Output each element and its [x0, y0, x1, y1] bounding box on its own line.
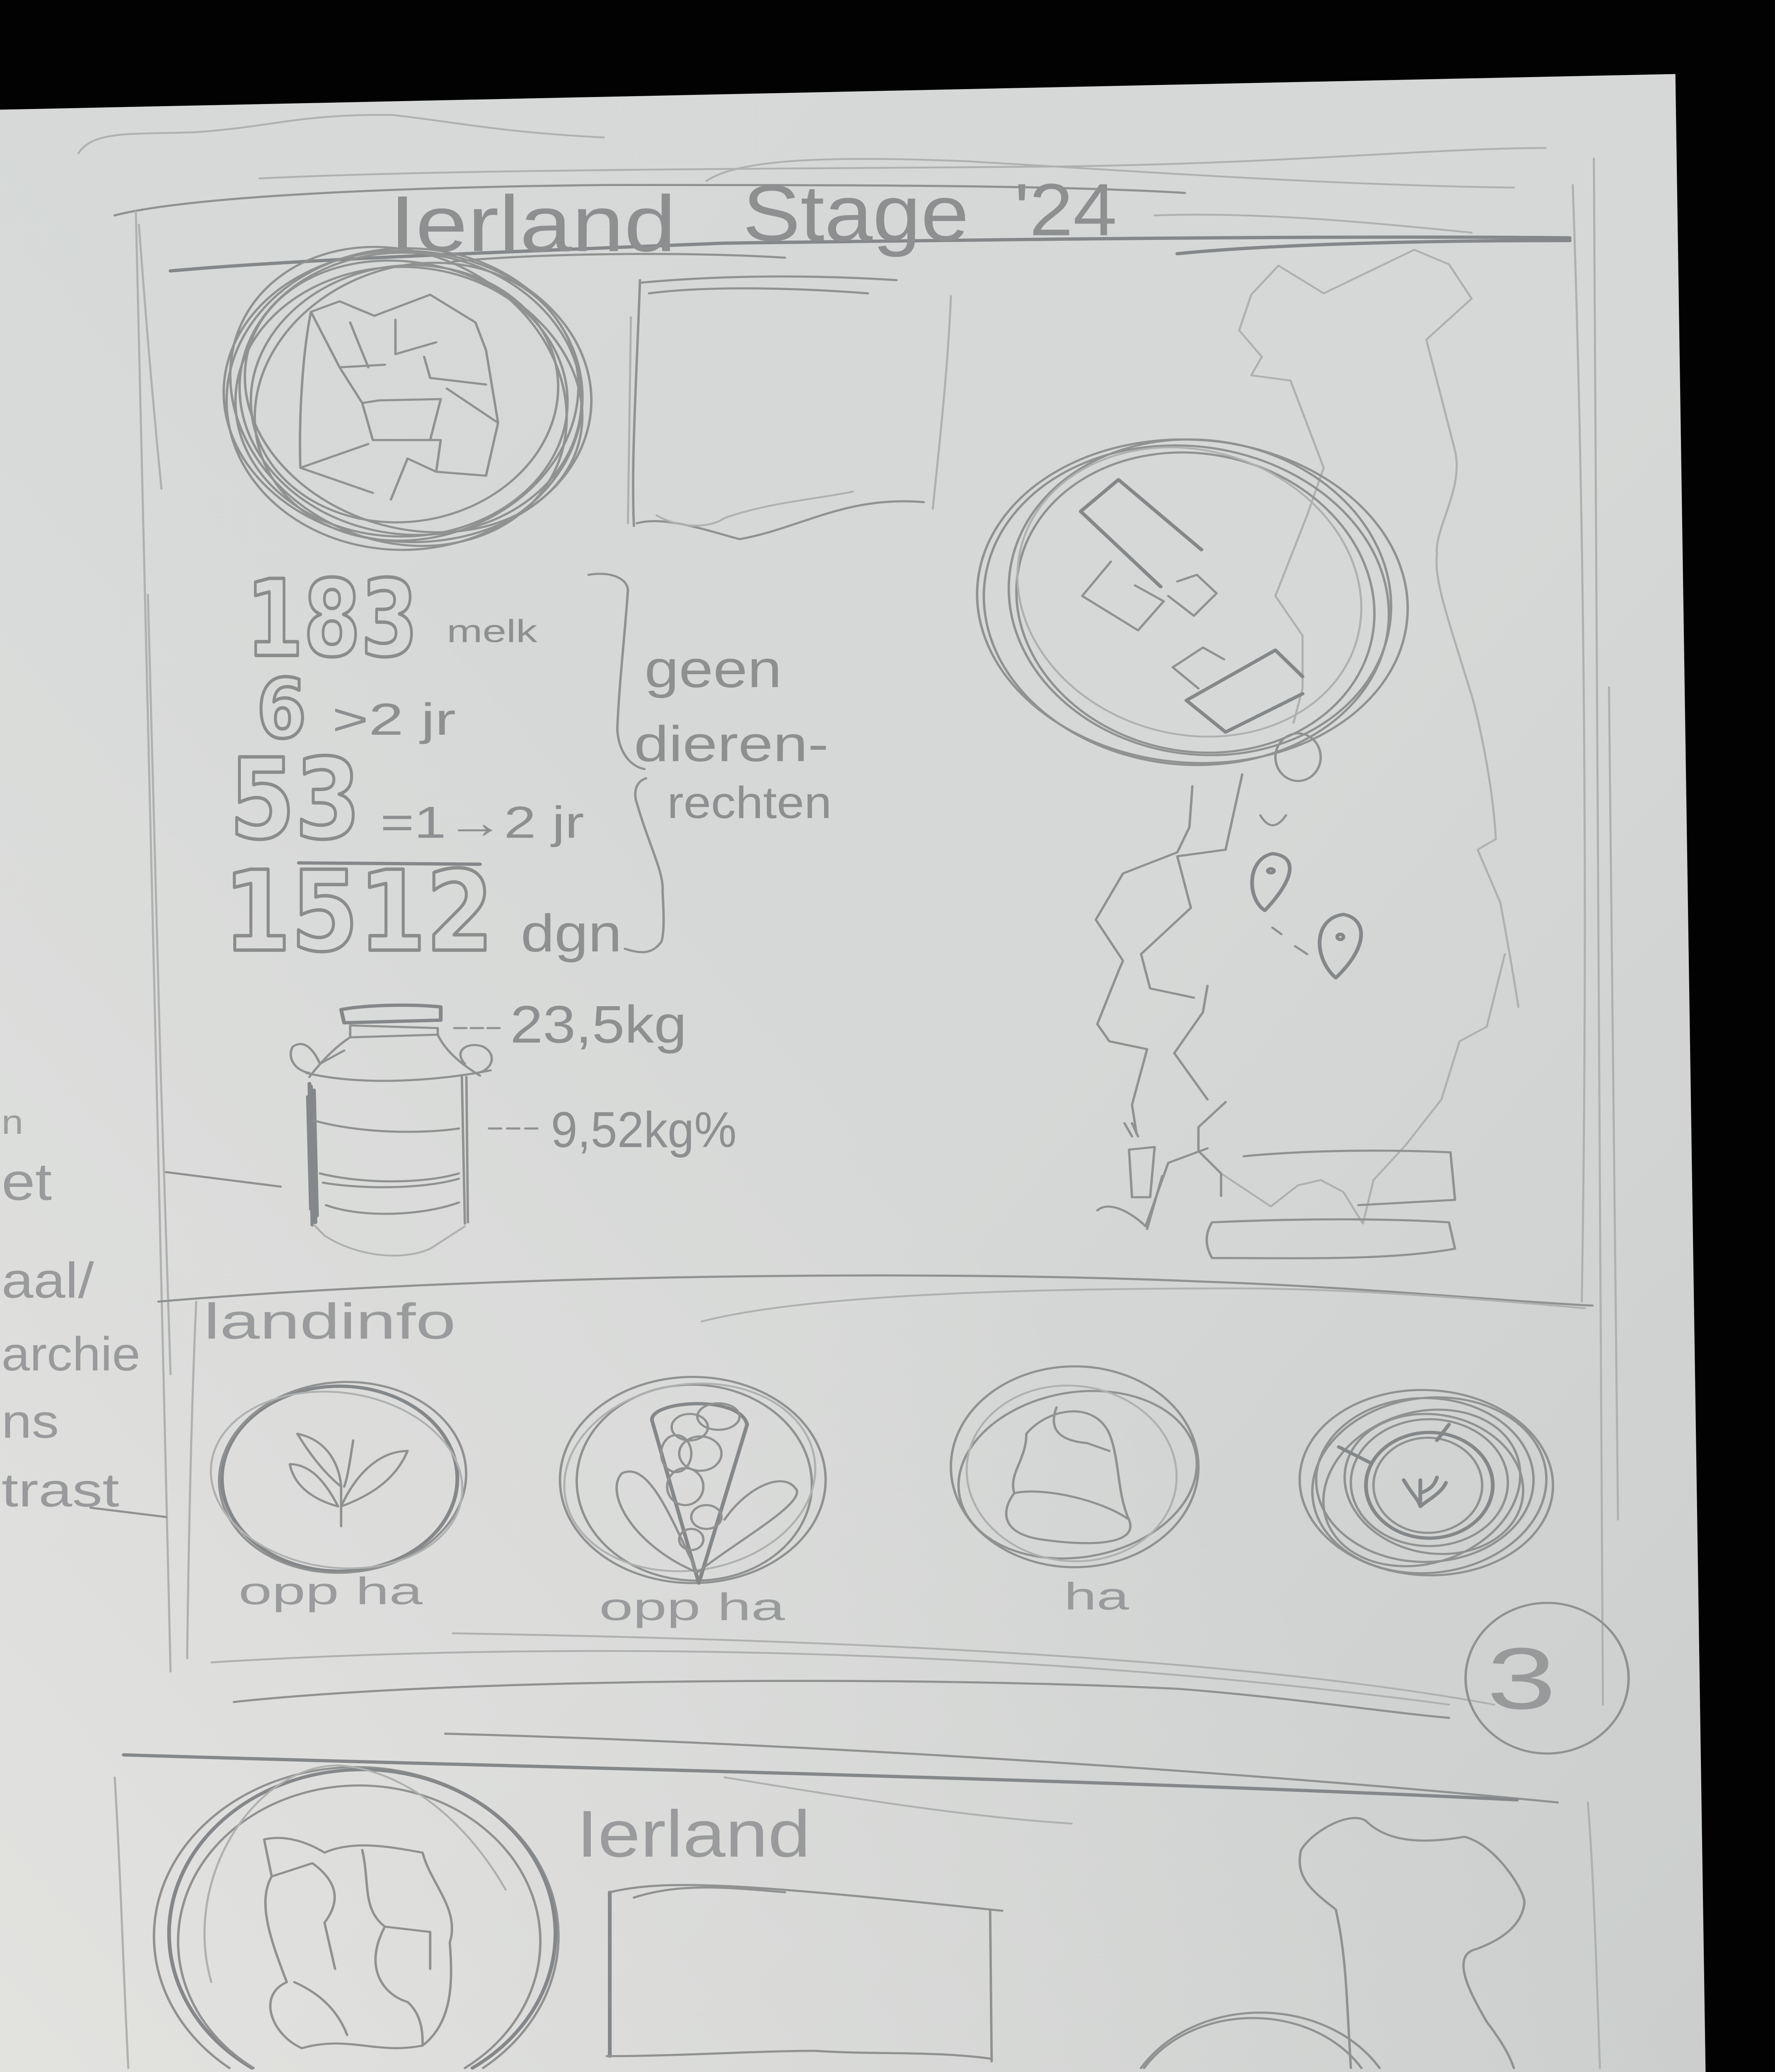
heading: landinfo: landinfo [204, 1293, 456, 1349]
label: opp ha: opp ha [239, 1570, 423, 1613]
title: Ierland [389, 179, 676, 268]
next sketch: stone wall circle [154, 1765, 559, 2068]
number: 53 between 1 and 2 years: 53 [230, 735, 361, 864]
number: 6 older than 2 years [256, 662, 456, 757]
margin notes from previous sketch: n [2, 1103, 23, 1141]
page number 3 [1465, 1603, 1629, 1754]
map of Ireland [1096, 250, 1519, 1258]
number: 183 melk: 183 [246, 557, 418, 680]
title: '24 [1014, 168, 1117, 251]
icon: potato circle [937, 1360, 1219, 1587]
map location markers [1252, 733, 1361, 978]
next sketch: photo placeholder box [607, 1885, 1002, 2061]
number: 1512 days: 1512 [223, 847, 493, 976]
note: geen dierenrechten: dieren- [634, 716, 829, 772]
note: geen dierenrechten: geen [645, 640, 782, 699]
next sketch: map of Ireland [1141, 1818, 1524, 2068]
note: geen dierenrechten: rechten [667, 777, 832, 828]
brace [589, 574, 664, 952]
number: 6 older than 2 years: >2 jr [332, 694, 456, 744]
next sketch: frame lines [115, 1777, 1600, 2068]
margin notes from previous sketch: ns [2, 1395, 59, 1448]
leader line [166, 1172, 281, 1187]
number: 183 melk: melk [447, 614, 538, 649]
margin notes from previous sketch: archie [2, 1327, 140, 1381]
margin notes from previous sketch: trast [2, 1464, 119, 1517]
number: 53 between 1 and 2 years [230, 735, 584, 864]
number: 53 between 1 and 2 years: =1→2 jr [380, 797, 584, 847]
icon: maize circle [540, 1359, 839, 1597]
icon: leaf plant circle [192, 1368, 481, 1588]
margin notes from previous sketch: et [2, 1152, 52, 1211]
page number 3: 3 [1487, 1629, 1556, 1727]
page frame strokes [78, 115, 1618, 1802]
photo placeholder box [628, 276, 951, 539]
icon: stone wall circle [161, 186, 643, 606]
map inset circle with farm buildings [945, 389, 1446, 810]
icon: seedling target circle [1291, 1379, 1565, 1597]
margin notes from previous sketch: aal/ [2, 1252, 94, 1308]
number: 6 older than 2 years: 6 [256, 662, 307, 757]
next sketch: title Ierland: Ierland [577, 1797, 810, 1871]
note: geen dierenrechten [634, 640, 832, 828]
title [389, 168, 1117, 268]
margin notes from previous sketch [2, 1103, 166, 1517]
number: 1512 days: dgn [521, 904, 622, 963]
title: Stage [742, 169, 969, 257]
label: 9,52 kg %: 9,52kg% [551, 1101, 737, 1158]
label: opp ha: opp ha [599, 1586, 785, 1629]
icon: milk churn [291, 1005, 492, 1256]
sum line [299, 863, 480, 864]
label: 23,5 kg: 23,5kg [510, 995, 687, 1054]
label: ha: ha [1064, 1575, 1129, 1618]
